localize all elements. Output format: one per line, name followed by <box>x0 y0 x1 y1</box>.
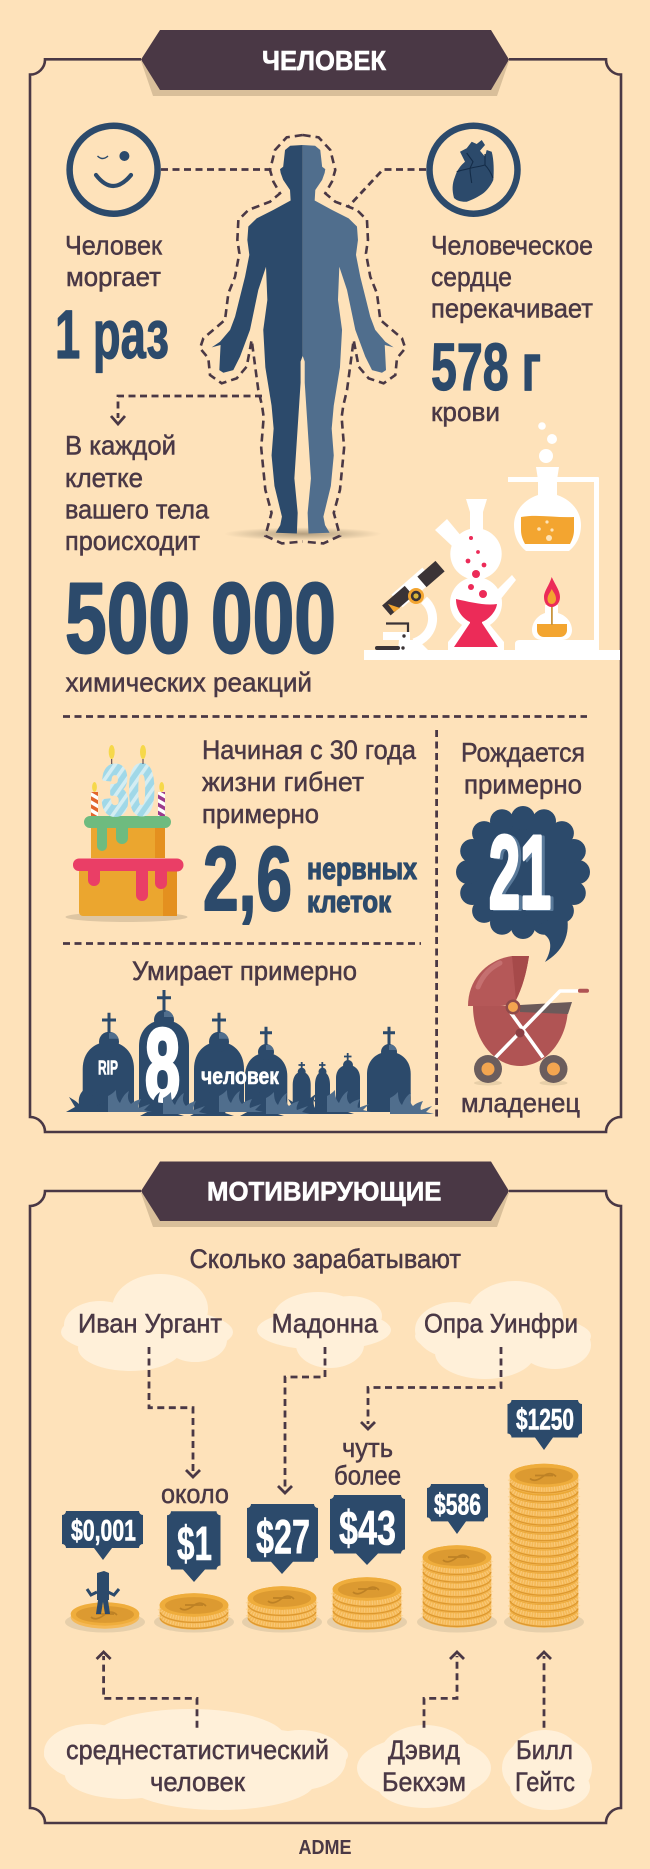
illustration: cake with 30 <box>66 745 188 922</box>
text: начиная с 30 года <box>202 735 417 829</box>
tombstone text: человек: человек <box>201 1063 279 1089</box>
text: чуть более <box>334 1433 401 1491</box>
text: сердце: перекачивает <box>431 294 593 324</box>
text: в каждой клетке: клетке <box>65 463 143 493</box>
connector: heart to body <box>348 170 426 207</box>
illustration: chemistry lab <box>364 422 620 660</box>
text: рождается примерно: Рождается <box>461 738 585 768</box>
badge: 21: 21 <box>489 815 551 931</box>
banner: человек <box>141 30 509 96</box>
banner: человек: ЧЕЛОВЕК <box>262 45 387 76</box>
text: сердце <box>431 230 593 324</box>
tag: $27: $27 <box>256 1512 310 1564</box>
tag: $0,001 <box>62 1511 143 1560</box>
coin stack: $43 <box>327 1577 407 1632</box>
text: химических реакций: химических реакций <box>66 667 312 697</box>
connector: smile to body <box>161 168 270 171</box>
illustration: cake with 30: 30 <box>102 751 155 829</box>
cloud: Мадонна: Мадонна <box>272 1308 379 1338</box>
text: сердце: сердце <box>431 262 512 292</box>
arrow: человек to $0,001 <box>97 1652 197 1728</box>
cloud: Дэвид Бекхэм: Бекхэм <box>382 1767 466 1797</box>
arrow: Гейтс to $1250 <box>537 1652 551 1728</box>
panel: мотивирующие <box>30 1162 621 1823</box>
arrow: Бекхэм to $586 <box>424 1652 464 1728</box>
cloud: Иван Ургант <box>61 1274 233 1371</box>
text: рождается примерно <box>461 738 585 799</box>
cloud: среднестатистический человек <box>44 1709 348 1810</box>
tombstone text: RIP: RIP <box>98 1058 118 1080</box>
text: начиная с 30 года: жизни гибнет <box>202 767 364 797</box>
panel: человек <box>30 30 621 1132</box>
tag: $1: $1 <box>177 1518 212 1571</box>
arrow: Иван Ургант to $1 <box>149 1347 200 1477</box>
tombstone number: 8: 8 <box>145 1008 180 1122</box>
coin stack: $586 <box>417 1545 497 1632</box>
text: чуть более: чуть <box>342 1433 393 1463</box>
stat: нервных клеток <box>307 851 418 919</box>
tag: $1250: $1250 <box>516 1404 574 1437</box>
text: человек моргает: Человек <box>65 230 162 260</box>
coin stack: $1 <box>154 1593 234 1632</box>
coin stack: $27 <box>242 1586 322 1632</box>
badge: 21 <box>456 806 590 962</box>
arrow: Мадонна to $27 <box>278 1347 325 1493</box>
cloud: Билл Гейтс <box>502 1730 592 1810</box>
text: начиная с 30 года: Начиная с 30 года <box>202 735 417 765</box>
tag: $586: $586 <box>434 1488 481 1522</box>
text: умирает примерно: Умирает примерно <box>132 956 357 986</box>
text: человек моргает <box>65 230 162 292</box>
text: начиная с 30 года: примерно <box>202 799 319 829</box>
cloud: среднестатистический человек: человек <box>150 1767 245 1797</box>
text: в каждой клетке: В каждой <box>65 431 176 461</box>
cloud: Дэвид Бекхэм <box>357 1725 491 1808</box>
text: в каждой клетке: происходит <box>65 526 200 556</box>
arrow: Опра to $43 <box>361 1347 501 1429</box>
grass <box>66 1088 434 1116</box>
icon: heart <box>430 126 518 214</box>
cloud: Опра Уинфри <box>415 1281 591 1379</box>
stat: нервных клеток: нервных <box>307 851 418 886</box>
banner: мотивирующие <box>141 1162 509 1227</box>
stat: нервных клеток: клеток <box>307 884 391 919</box>
heading: сколько зарабатывают: Сколько зарабатывают <box>190 1244 461 1274</box>
cloud: Опра Уинфри: Опра Уинфри <box>424 1308 578 1338</box>
cloud: среднестатистический человек: среднестатистический <box>66 1735 329 1765</box>
coin stack: средний человек <box>65 1602 145 1632</box>
illustration: graveyard <box>66 990 434 1122</box>
icon: wink smile <box>70 126 158 214</box>
arrow: body to text <box>111 396 262 424</box>
tag: $43 <box>330 1495 405 1565</box>
stat: 500 000: 500 000 <box>65 562 336 674</box>
text: около: около <box>161 1479 229 1509</box>
text: младенец: младенец <box>461 1088 580 1118</box>
text: чуть более: более <box>334 1461 401 1491</box>
text: человек моргает: моргает <box>66 262 161 292</box>
tag: $586 <box>427 1484 488 1534</box>
banner: мотивирующие: МОТИВИРУЮЩИЕ <box>207 1176 442 1206</box>
cloud: Билл Гейтс: Гейтс <box>515 1767 575 1797</box>
icon: tiny person <box>87 1571 119 1614</box>
coin stack: $1250 <box>504 1464 584 1632</box>
text: в каждой клетке: вашего тела <box>65 495 210 525</box>
stat: 578 г: 578 г <box>431 330 541 405</box>
footer: ADME: ADME <box>298 1837 352 1859</box>
cloud: Мадонна <box>257 1292 391 1368</box>
tag: $1 <box>167 1511 220 1582</box>
tag: $0,001: $0,001 <box>71 1515 136 1548</box>
stat: 1 раз: 1 раз <box>55 296 169 373</box>
text: рождается примерно: примерно <box>464 769 582 799</box>
cloud: Дэвид Бекхэм: Дэвид <box>388 1735 460 1765</box>
illustration: stroller <box>468 956 589 1086</box>
tag: $43: $43 <box>339 1502 396 1555</box>
cloud: Иван Ургант: Иван Ургант <box>78 1308 222 1338</box>
text: крови: крови <box>431 397 500 427</box>
text: сердце: Человеческое <box>431 230 593 260</box>
text: в каждой клетке <box>65 431 210 556</box>
tag: $27 <box>247 1504 318 1574</box>
stat: 2,6: 2,6 <box>203 829 292 930</box>
tag: $1250 <box>508 1400 582 1450</box>
cloud: Билл Гейтс: Билл <box>516 1735 573 1765</box>
body silhouette <box>200 135 405 543</box>
